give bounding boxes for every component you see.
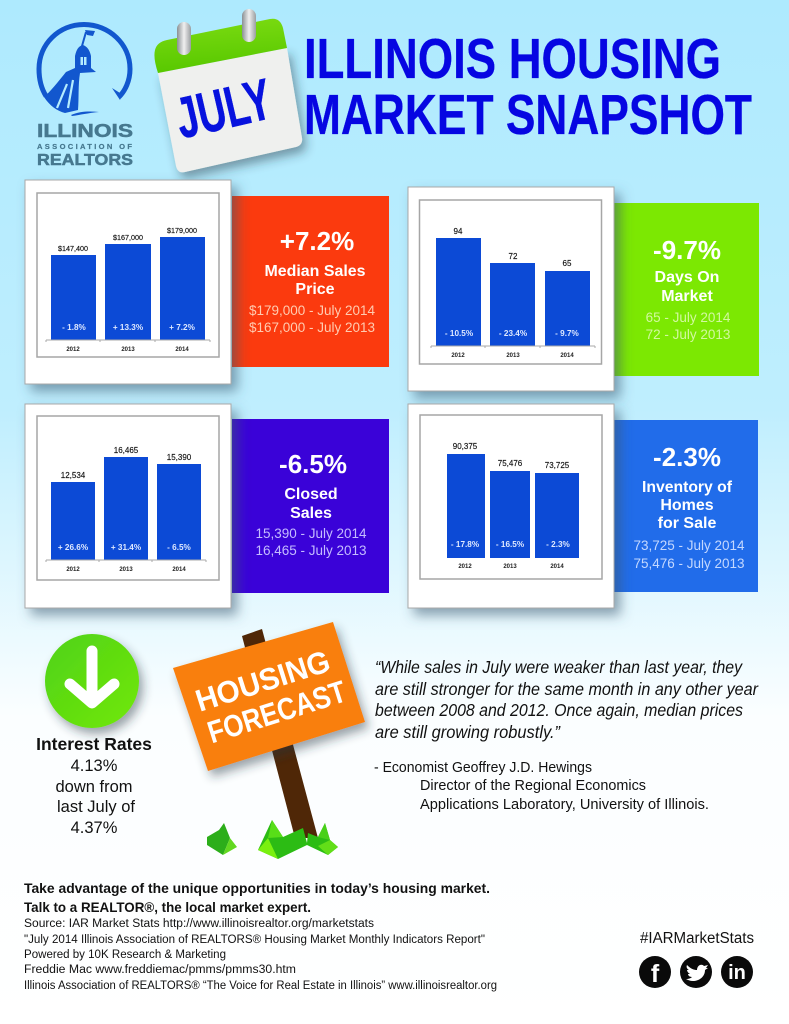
icon: linkedin (721, 956, 753, 988)
callout: closed sales: -6.5% (279, 449, 347, 479)
callout: median sales price: $167,000 - July 2013 (249, 320, 375, 335)
bar chart: median sales price: + 7.2% (169, 323, 196, 332)
bar chart: median sales price: $167,000 (113, 233, 143, 242)
source notes: Illinois Association of REALTORS® “The Voice for Real Estate in Illinois” www.illinoisrealtor.org (24, 980, 497, 992)
bar chart: inventory of homes: - 16.5% (496, 540, 525, 549)
bar chart: closed sales: 2014 (172, 567, 186, 573)
hashtag: #IARMarketStats (640, 930, 754, 947)
callout: days on market: 72 - July 2013 (646, 327, 730, 342)
icon: tilted July calendar (154, 9, 302, 172)
callout: median sales price: Median Sales (264, 263, 366, 280)
callout: closed sales: 16,465 - July 2013 (255, 543, 367, 558)
sign board (173, 622, 365, 771)
bar chart: median sales price: $179,000 (167, 226, 197, 235)
icon: linkedin: in (728, 962, 746, 984)
bar chart: median sales price (25, 180, 231, 384)
sign board: FORECAST (203, 674, 350, 750)
logo wordmark: ILLINOIS (37, 121, 133, 141)
bar chart: closed sales: 2013 (119, 567, 133, 573)
text block: interest rates (36, 734, 152, 837)
panel: closed sales (25, 404, 389, 608)
source notes: Freddie Mac www.freddiemac/pmms/pmms30.htm (24, 964, 296, 976)
quote: are still growing robustly.” (375, 722, 561, 742)
icon: facebook (639, 956, 671, 988)
bar chart: inventory of homes: 2014 (550, 564, 564, 570)
callout: inventory of homes: for Sale (658, 515, 716, 532)
call to action: Take advantage of the unique opportunities in today’s housing market. (24, 880, 490, 896)
icon: twitter (680, 956, 712, 988)
text block: interest rates: 4.37% (71, 819, 118, 837)
source notes: "July 2014 Illinois Association of REALTORS® Housing Market Monthly Indicators Report" (24, 934, 485, 946)
source notes: Powered by 10K Research & Marketing (24, 949, 226, 961)
grass (207, 820, 338, 859)
source notes: Source: IAR Market Stats http://www.illinoisrealtor.org/marketstats (24, 918, 374, 930)
callout: closed sales: 15,390 - July 2014 (255, 526, 367, 541)
icon: green down arrow (45, 634, 139, 728)
panel: median sales price (25, 180, 389, 384)
callout: inventory of homes: 75,476 - July 2013 (633, 556, 745, 571)
bar chart: inventory of homes: 90,375 (453, 442, 478, 451)
bar chart: closed sales: - 6.5% (167, 543, 192, 552)
call to action (24, 880, 490, 915)
sign post (242, 629, 318, 838)
callout: median sales price: +7.2% (280, 226, 354, 256)
bar chart: inventory of homes (408, 404, 614, 608)
calendar month: JULY (170, 67, 278, 151)
logo wordmark (37, 121, 133, 169)
quote: “While sales in July were weaker than last year, they (375, 657, 743, 677)
bar chart: inventory of homes: - 17.8% (451, 540, 480, 549)
panel: inventory of homes for sale (408, 404, 758, 608)
logo: Illinois Association of Realtors (37, 24, 133, 169)
callout: days on market: 65 - July 2014 (646, 310, 731, 325)
bar chart: days on market: 94 (454, 227, 463, 236)
bar chart: median sales price: 2014 (175, 347, 189, 353)
title (304, 27, 752, 147)
bar chart: days on market: - 23.4% (499, 329, 528, 338)
calendar ring left (177, 22, 191, 55)
bar chart: inventory of homes: - 2.3% (546, 540, 571, 549)
bar chart: inventory of homes: 75,476 (498, 459, 523, 468)
callout: median sales price (232, 196, 389, 367)
bar chart: days on market: 2013 (506, 353, 520, 359)
bar chart: median sales price: 2012 (66, 347, 80, 353)
bar chart: days on market: 65 (563, 259, 572, 268)
bar chart: days on market: 2014 (560, 353, 574, 359)
callout: days on market: Days On (655, 269, 719, 286)
callout: median sales price: Price (295, 281, 335, 298)
source notes (24, 918, 497, 992)
bar chart: median sales price: - 1.8% (62, 323, 87, 332)
bar chart: closed sales: + 26.6% (58, 543, 89, 552)
panel: days on market (408, 187, 759, 391)
bar chart: days on market: 72 (509, 252, 518, 261)
bar chart: inventory of homes: 73,725 (545, 461, 570, 470)
icon: capitol dome in circle (39, 24, 130, 116)
bar chart: closed sales: + 31.4% (111, 543, 142, 552)
logo wordmark: ASSOCIATION OF (37, 142, 132, 151)
callout: days on market: Market (661, 288, 713, 305)
bar chart: median sales price: $147,400 (58, 244, 88, 253)
bar chart: median sales price: + 13.3% (113, 323, 144, 332)
callout: median sales price: $179,000 - July 2014 (249, 303, 376, 318)
callout: closed sales (232, 419, 389, 593)
quote (375, 657, 759, 742)
bar chart: inventory of homes: 2013 (503, 564, 517, 570)
bar chart: median sales price: 2013 (121, 347, 135, 353)
bar chart: closed sales: 12,534 (61, 471, 86, 480)
attribution: Director of the Regional Economics (420, 778, 646, 794)
bar chart: days on market: 2012 (451, 353, 465, 359)
text block: interest rates: last July of (57, 798, 135, 816)
attribution (374, 760, 709, 813)
bar chart: days on market: - 9.7% (555, 329, 580, 338)
callout: closed sales: Closed (284, 486, 338, 503)
callout: inventory of homes: 73,725 - July 2014 (633, 538, 745, 553)
callout: days on market (612, 203, 759, 376)
quote: between 2008 and 2012. Once again, median prices (375, 700, 743, 720)
sign board: HOUSING (191, 643, 334, 719)
bar chart: closed sales: 15,390 (167, 453, 192, 462)
icon: facebook: f (651, 960, 660, 988)
bar chart: days on market (408, 187, 614, 391)
callout: inventory of homes: Homes (660, 497, 714, 514)
calendar ring right (242, 9, 256, 42)
call to action: Talk to a REALTOR®, the local market expert. (24, 899, 311, 915)
logo wordmark: REALTORS (37, 152, 133, 169)
bar chart: closed sales: 16,465 (114, 446, 139, 455)
quote: are still stronger for the same month in any other year (375, 679, 759, 699)
callout: closed sales: Sales (290, 505, 332, 522)
bar chart: closed sales: 2012 (66, 567, 80, 573)
icon: housing forecast sign (173, 622, 365, 859)
callout: inventory of homes: Inventory of (642, 479, 733, 496)
text block: interest rates: 4.13% (71, 757, 118, 775)
bar chart: inventory of homes: 2012 (458, 564, 472, 570)
callout: inventory of homes (612, 420, 758, 592)
bar chart: closed sales (25, 404, 231, 608)
attribution: Applications Laboratory, University of Illinois. (420, 797, 709, 813)
text block: interest rates: down from (55, 778, 133, 796)
attribution: - Economist Geoffrey J.D. Hewings (374, 760, 592, 776)
callout: inventory of homes: -2.3% (653, 442, 721, 472)
text block: interest rates: Interest Rates (36, 734, 152, 754)
bar chart: days on market: - 10.5% (445, 329, 474, 338)
callout: days on market: -9.7% (653, 235, 721, 265)
